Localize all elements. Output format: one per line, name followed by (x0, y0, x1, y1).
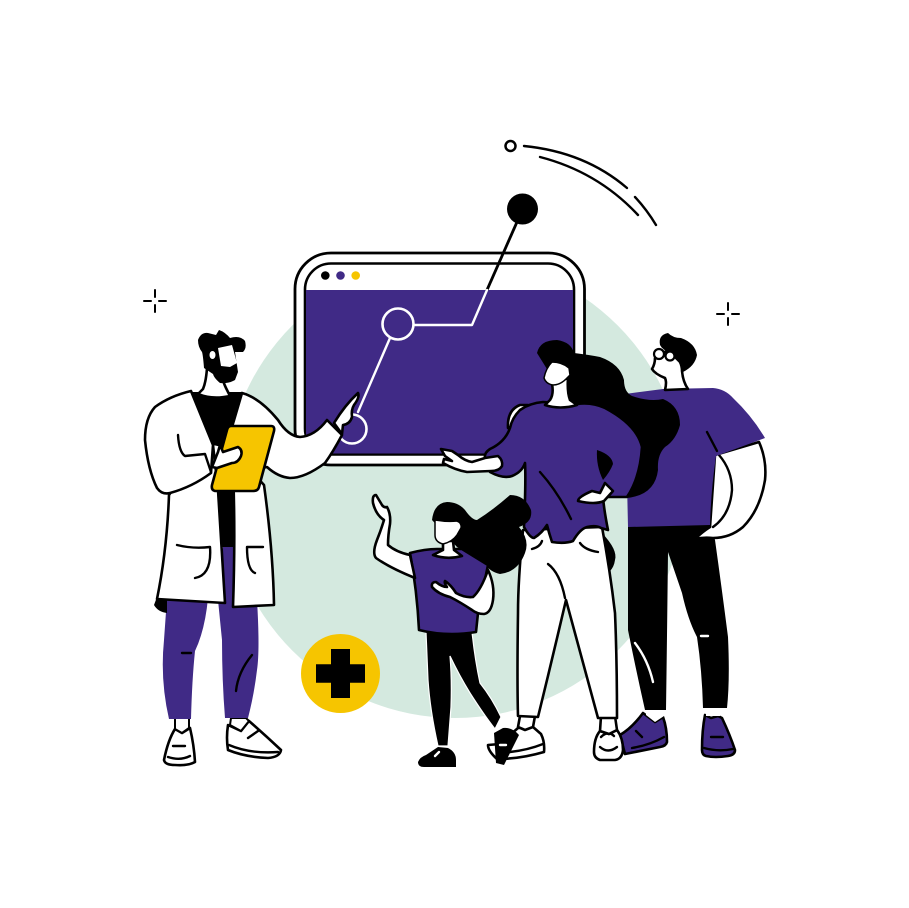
man glasses (654, 349, 674, 360)
man pants (628, 524, 729, 710)
doctor ear (210, 351, 216, 359)
man arm (695, 442, 765, 539)
woman reaching arm (441, 449, 502, 472)
man shirt (625, 388, 765, 527)
girl shoe right (494, 728, 519, 765)
woman far shoulder (508, 405, 528, 428)
woman hip hand (578, 483, 613, 503)
sparkle right (717, 303, 739, 325)
girl face (435, 520, 461, 544)
doctor hair and beard (198, 330, 246, 383)
doctor knee folds (182, 653, 252, 691)
doctor face (218, 345, 237, 367)
woman waist gap (597, 450, 613, 480)
man hair (660, 333, 697, 372)
window dots (321, 271, 360, 280)
doctor left sleeve (145, 391, 213, 493)
figure: woman (441, 340, 680, 760)
woman face (544, 362, 570, 385)
doctor pants (163, 547, 258, 719)
doctor coat (157, 445, 274, 607)
doctor shirt (190, 392, 243, 547)
woman neck (545, 378, 577, 408)
clipboard tablet (212, 426, 274, 491)
doctor shoes (164, 721, 281, 765)
woman socks (518, 716, 617, 734)
figure: man with glasses (620, 333, 765, 757)
chart line with nodes (338, 194, 538, 444)
sparkle left (144, 290, 166, 312)
girl shoe left (418, 747, 456, 767)
badge: medical cross (301, 634, 380, 713)
man neck and face (652, 350, 688, 390)
background circle (225, 258, 685, 718)
doctor neck (198, 368, 230, 398)
girl folded arm (432, 570, 493, 614)
doctor socks (175, 718, 249, 733)
girl raised arm (373, 495, 415, 578)
woman sweater fold (540, 472, 571, 519)
doctor right arm (232, 393, 342, 478)
man shoes (620, 713, 735, 757)
doctor pointing hand (334, 393, 358, 434)
doctor hand on tablet (212, 445, 242, 468)
panel: browser screen (295, 253, 584, 465)
woman shoes (488, 727, 623, 760)
coat hem shadow (154, 597, 167, 613)
woman back shadow (602, 533, 615, 571)
woman pants (518, 527, 617, 718)
girl neck (433, 541, 462, 558)
girl long hair (432, 495, 531, 574)
woman long hair (537, 340, 680, 498)
woman sweater (485, 402, 642, 543)
man pant highlights (635, 636, 708, 682)
figure: doctor (145, 330, 358, 765)
shoe highlights (435, 745, 506, 756)
girl t-shirt (410, 549, 488, 634)
girl leggings (426, 632, 501, 746)
man socks (646, 706, 720, 722)
woman pant folds (532, 541, 598, 598)
coat pockets (177, 545, 263, 578)
coat sleeve folds (178, 435, 211, 472)
figure: girl (373, 495, 531, 767)
orbit decoration (506, 141, 656, 225)
